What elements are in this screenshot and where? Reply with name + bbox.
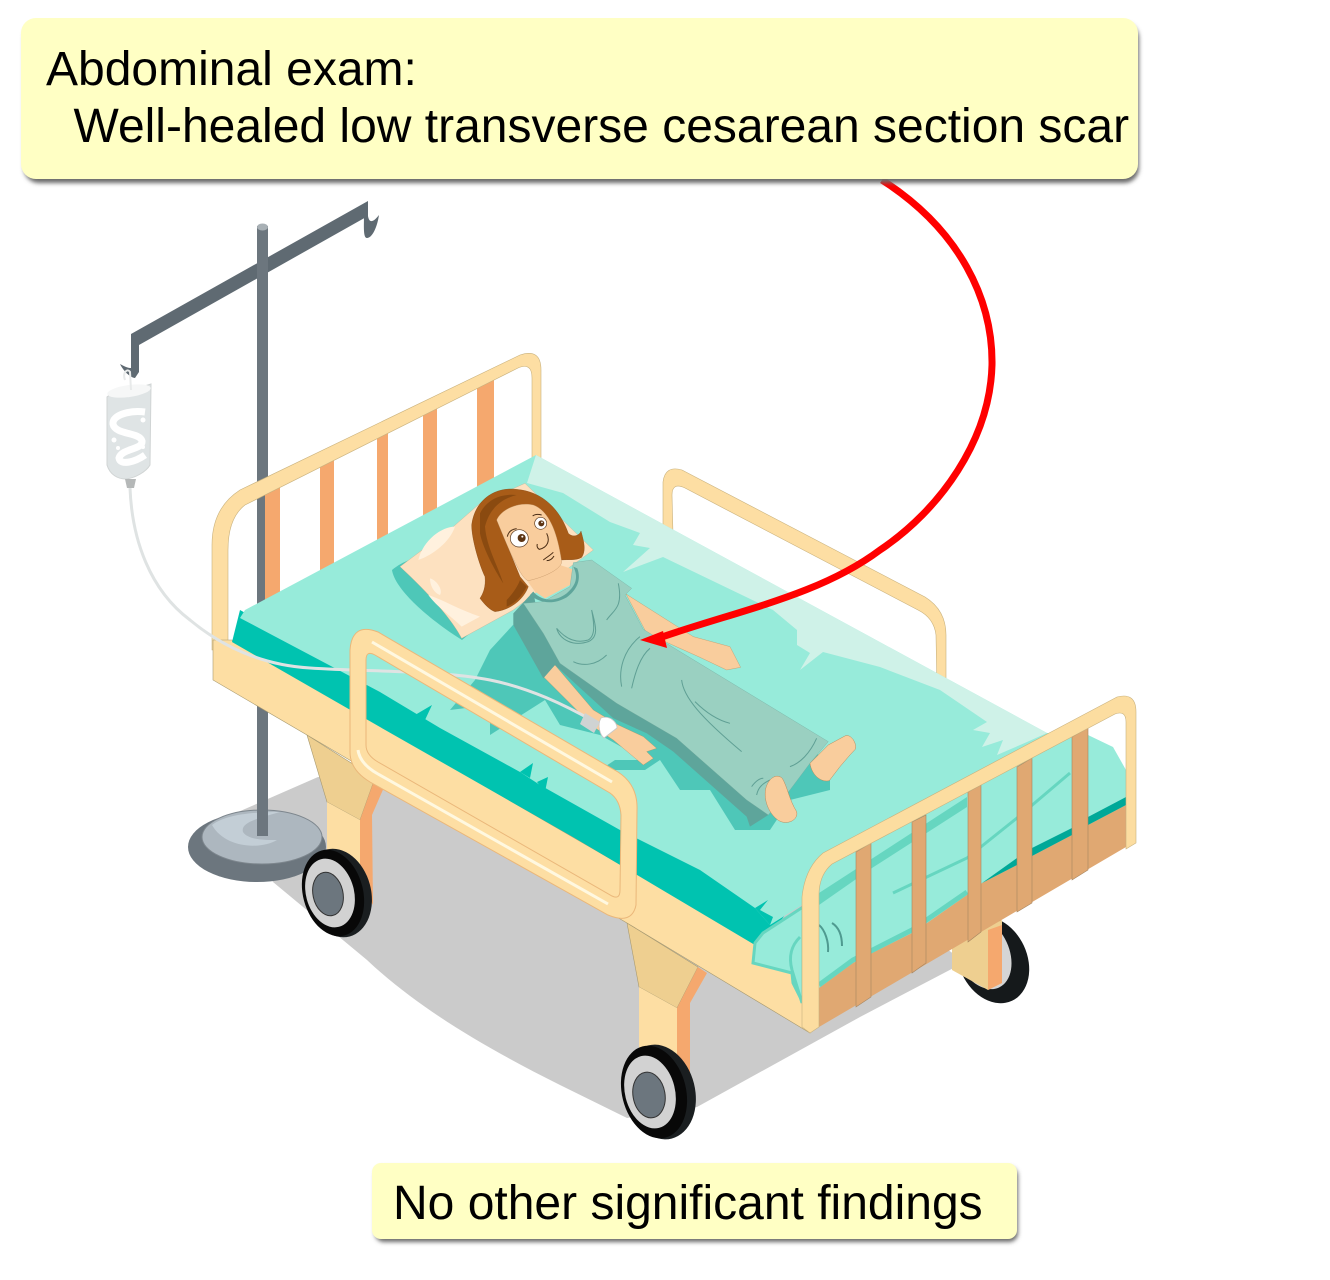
cannula and wristband <box>580 713 617 738</box>
right hook <box>364 201 379 238</box>
callout: abdominal exam <box>21 18 1139 183</box>
stand arm with hooks <box>120 201 368 378</box>
stand pole <box>257 224 268 836</box>
light sheet strip <box>527 455 1047 755</box>
leg: head end <box>307 735 385 905</box>
red arrow <box>640 180 992 648</box>
footboard bars <box>856 728 1088 1007</box>
sheet shadow under patient <box>450 625 830 830</box>
sheet edge spikes <box>415 705 773 925</box>
pillow shadow <box>392 557 480 640</box>
hair shading <box>480 495 527 607</box>
foot right <box>810 736 856 781</box>
floor shadow <box>238 760 965 1118</box>
mattress side <box>232 610 785 948</box>
eye left <box>510 530 528 547</box>
arm right <box>626 594 741 670</box>
foot left <box>765 776 797 822</box>
near side rail <box>350 629 637 918</box>
patient <box>400 483 856 827</box>
pillow highlights <box>418 527 480 627</box>
far side rail <box>663 469 946 690</box>
callout: abdominal exam: Abdominal exam: <box>46 43 417 96</box>
gown collar <box>530 567 579 602</box>
callout: no other findings <box>372 1163 1018 1242</box>
headboard bars <box>265 380 494 610</box>
headboard rail <box>212 353 541 650</box>
arm left with hand <box>543 665 657 765</box>
IV tube <box>130 488 595 722</box>
face <box>497 504 562 581</box>
gown <box>523 560 828 815</box>
gown folds <box>557 583 817 795</box>
IV bag <box>106 370 152 488</box>
gown side shade <box>513 592 768 827</box>
rear wheel and leg <box>943 905 1043 1015</box>
eye right <box>535 517 547 529</box>
IV stand <box>120 201 379 882</box>
neck <box>527 565 575 598</box>
mattress top sheet <box>240 455 1126 1003</box>
pillow <box>400 483 593 638</box>
stand base <box>188 810 326 882</box>
brows, nose and mouth <box>507 514 554 561</box>
callout: no other findings: No other significant findings <box>393 1177 983 1230</box>
hair <box>472 489 584 612</box>
leg: front <box>627 923 707 1075</box>
sheet bands <box>753 773 1126 1003</box>
footboard panel <box>819 805 1126 1027</box>
wheel: head end <box>293 841 382 945</box>
footboard rail <box>802 696 1136 1033</box>
callout: abdominal exam: Well-healed low transverse cesarean section scar <box>74 100 1129 153</box>
near rail highlight <box>358 642 612 904</box>
bed frame <box>213 640 820 1033</box>
wheel: front <box>612 1037 706 1147</box>
